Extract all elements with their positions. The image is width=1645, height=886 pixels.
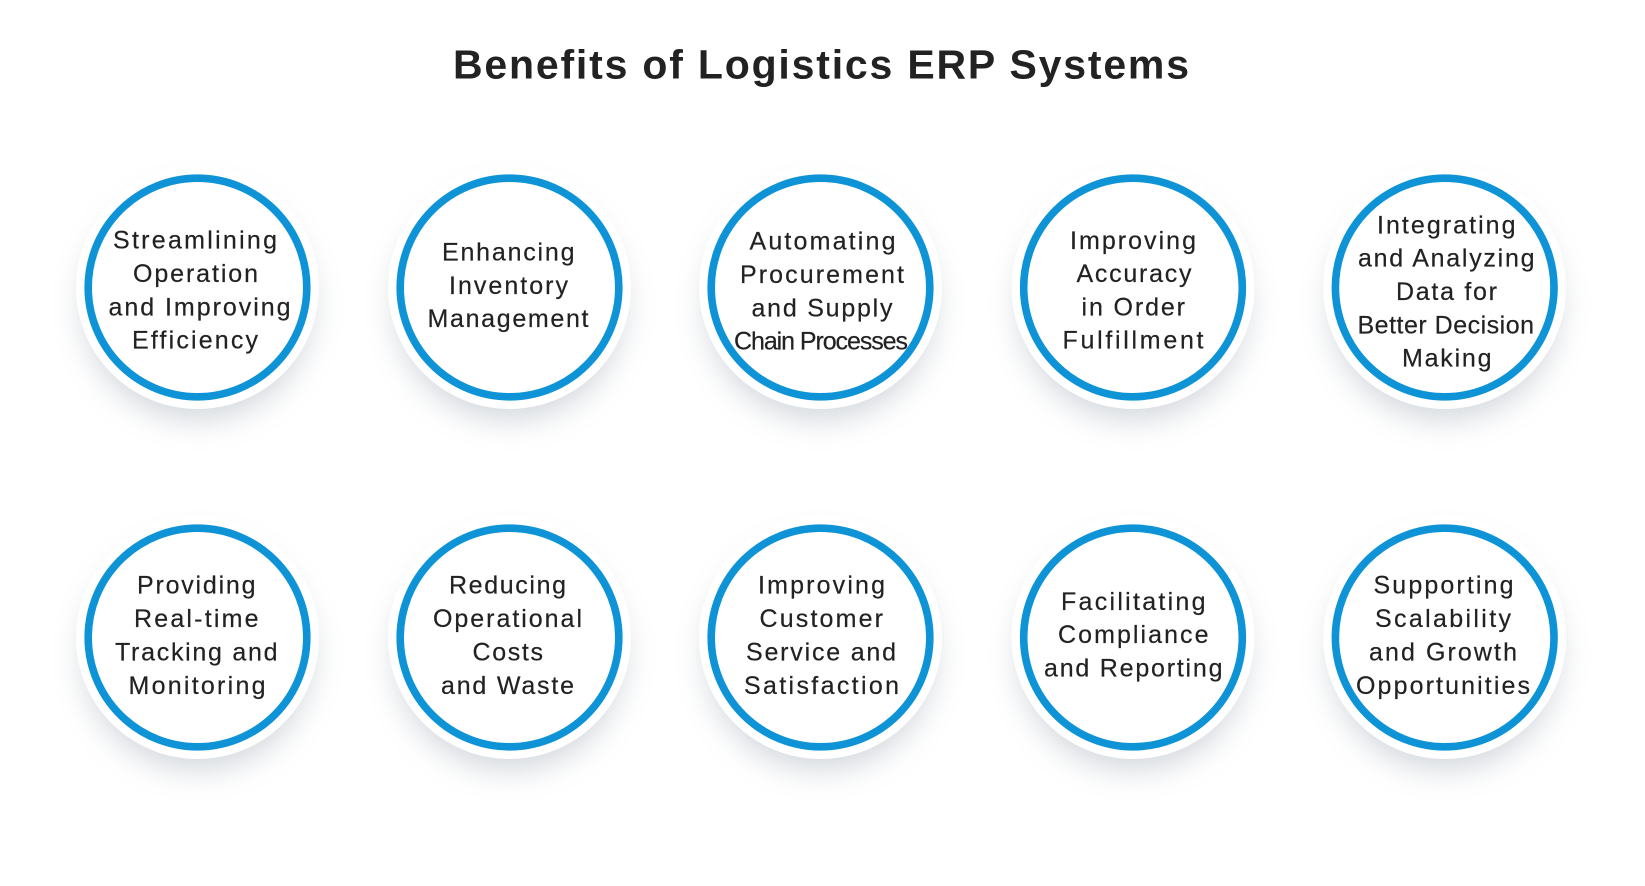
panel: Streamlining Operation and Improving Efficiency xyxy=(76,166,319,420)
label: Enhancing Inventory Management: Enhancing xyxy=(442,238,574,266)
label: Improving Customer Service and Satisfaction: Satisfaction xyxy=(744,672,899,700)
label: Improving Customer Service and Satisfaction: Service and xyxy=(746,638,896,666)
label: Reducing Operational Costs and Waste: Costs xyxy=(472,638,543,666)
label: Supporting Scalability and Growth Opportunities xyxy=(1356,572,1530,700)
label: Automating Procurement and Supply Chain Processes xyxy=(734,228,908,356)
label: Streamlining Operation and Improving Efficiency: and Improving xyxy=(108,294,290,322)
panel: Reducing Operational Costs and Waste xyxy=(388,516,631,770)
label: Providing Real-time Tracking and Monitoring: Providing xyxy=(137,572,256,600)
label: Automating Procurement and Supply Chain Processes: Chain Processes xyxy=(734,328,908,356)
label: Streamlining Operation and Improving Efficiency: Efficiency xyxy=(132,326,258,354)
panel: Improving Customer Service and Satisfaction xyxy=(699,516,942,770)
label: Enhancing Inventory Management xyxy=(428,238,589,333)
label: Streamlining Operation and Improving Efficiency: Operation xyxy=(133,260,258,288)
label: Improving Accuracy in Order Fulfillment xyxy=(1062,227,1204,354)
label: Integrating and Analyzing Data for Better Decision Making: Better Decision xyxy=(1358,312,1534,340)
label: Providing Real-time Tracking and Monitoring: Tracking and xyxy=(115,638,278,666)
label: Improving Customer Service and Satisfaction: Customer xyxy=(760,605,883,633)
label: Integrating and Analyzing Data for Better Decision Making: and Analyzing xyxy=(1358,244,1534,272)
label: Supporting Scalability and Growth Opportunities: and Growth xyxy=(1369,638,1517,666)
label: Facilitating Compliance and Reporting xyxy=(1044,588,1222,682)
label: Improving Customer Service and Satisfaction: Improving xyxy=(758,572,885,600)
label: Providing Real-time Tracking and Monitoring: Monitoring xyxy=(128,672,266,700)
panel: Automating Procurement and Supply Chain Processes xyxy=(699,166,942,420)
panel: Integrating and Analyzing Data for Better Decision Making xyxy=(1323,166,1566,420)
label: Improving Customer Service and Satisfaction xyxy=(744,572,899,700)
label: Reducing Operational Costs and Waste: and Waste xyxy=(441,672,574,700)
label: Integrating and Analyzing Data for Better Decision Making: Data for xyxy=(1396,278,1497,306)
label: Automating Procurement and Supply Chain Processes: and Supply xyxy=(752,294,893,322)
title: Benefits of Logistics ERP Systems xyxy=(453,42,1189,88)
label: Streamlining Operation and Improving Efficiency xyxy=(108,226,290,354)
label: Integrating and Analyzing Data for Better Decision Making xyxy=(1358,212,1534,372)
label: Automating Procurement and Supply Chain Processes: Procurement xyxy=(740,261,904,289)
label: Reducing Operational Costs and Waste xyxy=(433,572,582,700)
label: Enhancing Inventory Management: Inventory xyxy=(449,272,568,300)
label: Reducing Operational Costs and Waste: Reducing xyxy=(449,572,566,600)
panel: Providing Real-time Tracking and Monitoring xyxy=(76,516,319,770)
label: Improving Accuracy in Order Fulfillment: Improving xyxy=(1070,227,1196,255)
label: Enhancing Inventory Management: Management xyxy=(428,305,589,333)
label: Streamlining Operation and Improving Efficiency: Streamlining xyxy=(113,226,277,254)
label: Supporting Scalability and Growth Opportunities: Scalability xyxy=(1375,605,1512,633)
panel: Facilitating Compliance and Reporting xyxy=(1012,516,1254,770)
label: Facilitating Compliance and Reporting: Compliance xyxy=(1058,621,1208,649)
label: Improving Accuracy in Order Fulfillment: Accuracy xyxy=(1076,260,1192,288)
panel: Enhancing Inventory Management xyxy=(388,166,631,420)
label: Facilitating Compliance and Reporting: Facilitating xyxy=(1061,588,1206,616)
label: Facilitating Compliance and Reporting: and Reporting xyxy=(1044,654,1222,682)
label: Supporting Scalability and Growth Opportunities: Opportunities xyxy=(1356,672,1530,700)
label: Automating Procurement and Supply Chain Processes: Automating xyxy=(750,228,896,256)
label: Integrating and Analyzing Data for Better Decision Making: Integrating xyxy=(1377,212,1516,240)
panel: Supporting Scalability and Growth Opportunities xyxy=(1323,516,1566,770)
label: Supporting Scalability and Growth Opportunities: Supporting xyxy=(1374,572,1514,600)
panel: Improving Accuracy in Order Fulfillment xyxy=(1012,166,1254,420)
label: Reducing Operational Costs and Waste: Operational xyxy=(433,605,582,633)
label: Improving Accuracy in Order Fulfillment: in Order xyxy=(1082,294,1185,322)
label: Improving Accuracy in Order Fulfillment: Fulfillment xyxy=(1062,326,1204,354)
label: Integrating and Analyzing Data for Better Decision Making: Making xyxy=(1402,344,1492,372)
label: Providing Real-time Tracking and Monitoring: Real-time xyxy=(134,605,258,633)
label: Providing Real-time Tracking and Monitoring xyxy=(115,572,278,700)
